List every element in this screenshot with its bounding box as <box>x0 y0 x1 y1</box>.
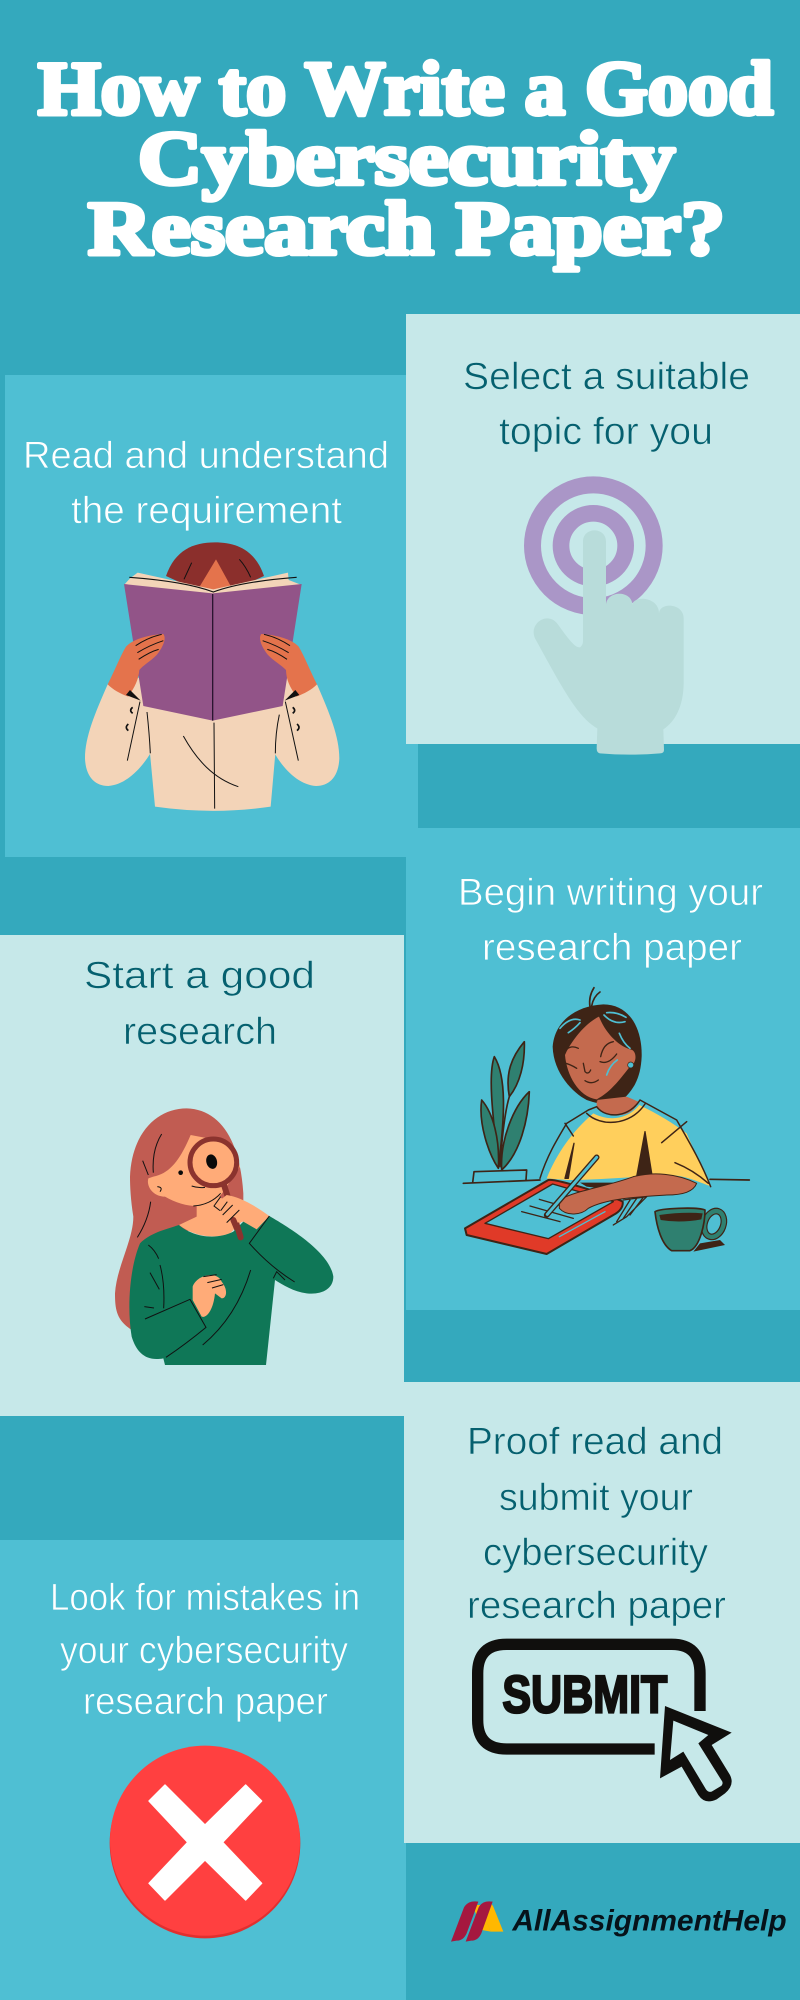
title <box>38 47 773 271</box>
heading: read and understand: Read and understand <box>23 435 389 477</box>
heading: start a good research: Start a good <box>84 955 315 997</box>
heading: begin writing: research paper <box>482 927 742 969</box>
heading: look for mistakes: research paper <box>83 1681 328 1723</box>
title: How to Write a Good <box>38 47 773 131</box>
heading: proof read and submit: cybersecurity <box>483 1532 708 1574</box>
icon: submit button with cursor <box>478 1644 732 1801</box>
icon: finger pressing target <box>532 485 684 755</box>
heading: start a good research <box>84 955 315 1053</box>
panel: start a good research <box>0 935 404 1416</box>
heading: begin writing <box>458 872 763 969</box>
heading: select a suitable topic for you: topic for you <box>499 411 713 453</box>
panel: proof read and submit <box>404 1382 800 1843</box>
heading: begin writing: Begin writing your <box>458 872 763 914</box>
panel: select a suitable topic <box>406 314 800 755</box>
logo mark <box>451 1901 503 1942</box>
heading: look for mistakes <box>50 1577 360 1723</box>
icon: submit button with cursor: SUBMIT <box>502 1666 667 1725</box>
plant <box>463 1042 749 1183</box>
heading: look for mistakes: your cybersecurity <box>60 1630 348 1672</box>
heading: proof read and submit: research paper <box>467 1585 726 1627</box>
icon: girl with magnifying glass <box>115 1108 333 1365</box>
icon: red cross mark <box>110 1746 300 1938</box>
logo: AllAssignmentHelp <box>451 1901 787 1942</box>
icon: person reading a book <box>85 542 339 811</box>
heading: proof read and submit: Proof read and <box>467 1421 723 1463</box>
cup <box>693 1240 725 1252</box>
heading: select a suitable topic for you <box>463 356 750 453</box>
panel: begin writing your research paper <box>406 828 800 1310</box>
logo text: AllAssignmentHelp <box>511 1905 787 1938</box>
heading: look for mistakes: Look for mistakes in <box>50 1577 360 1619</box>
heading: proof read and submit <box>467 1421 726 1627</box>
heading: select a suitable topic for you: Select a suitable <box>463 356 750 398</box>
heading: read and understand: the requirement <box>71 490 342 532</box>
heading: read and understand <box>23 435 389 532</box>
title: Research Paper? <box>88 187 725 271</box>
heading: proof read and submit: submit your <box>499 1477 693 1519</box>
title: Cybersecurity <box>138 117 675 201</box>
tablet <box>613 1197 647 1225</box>
icon: woman writing on a tablet <box>463 988 749 1254</box>
panel: look for mistakes <box>0 1540 406 2000</box>
panel: read and understand the requirement <box>5 375 418 857</box>
heading: start a good research: research <box>123 1011 277 1053</box>
